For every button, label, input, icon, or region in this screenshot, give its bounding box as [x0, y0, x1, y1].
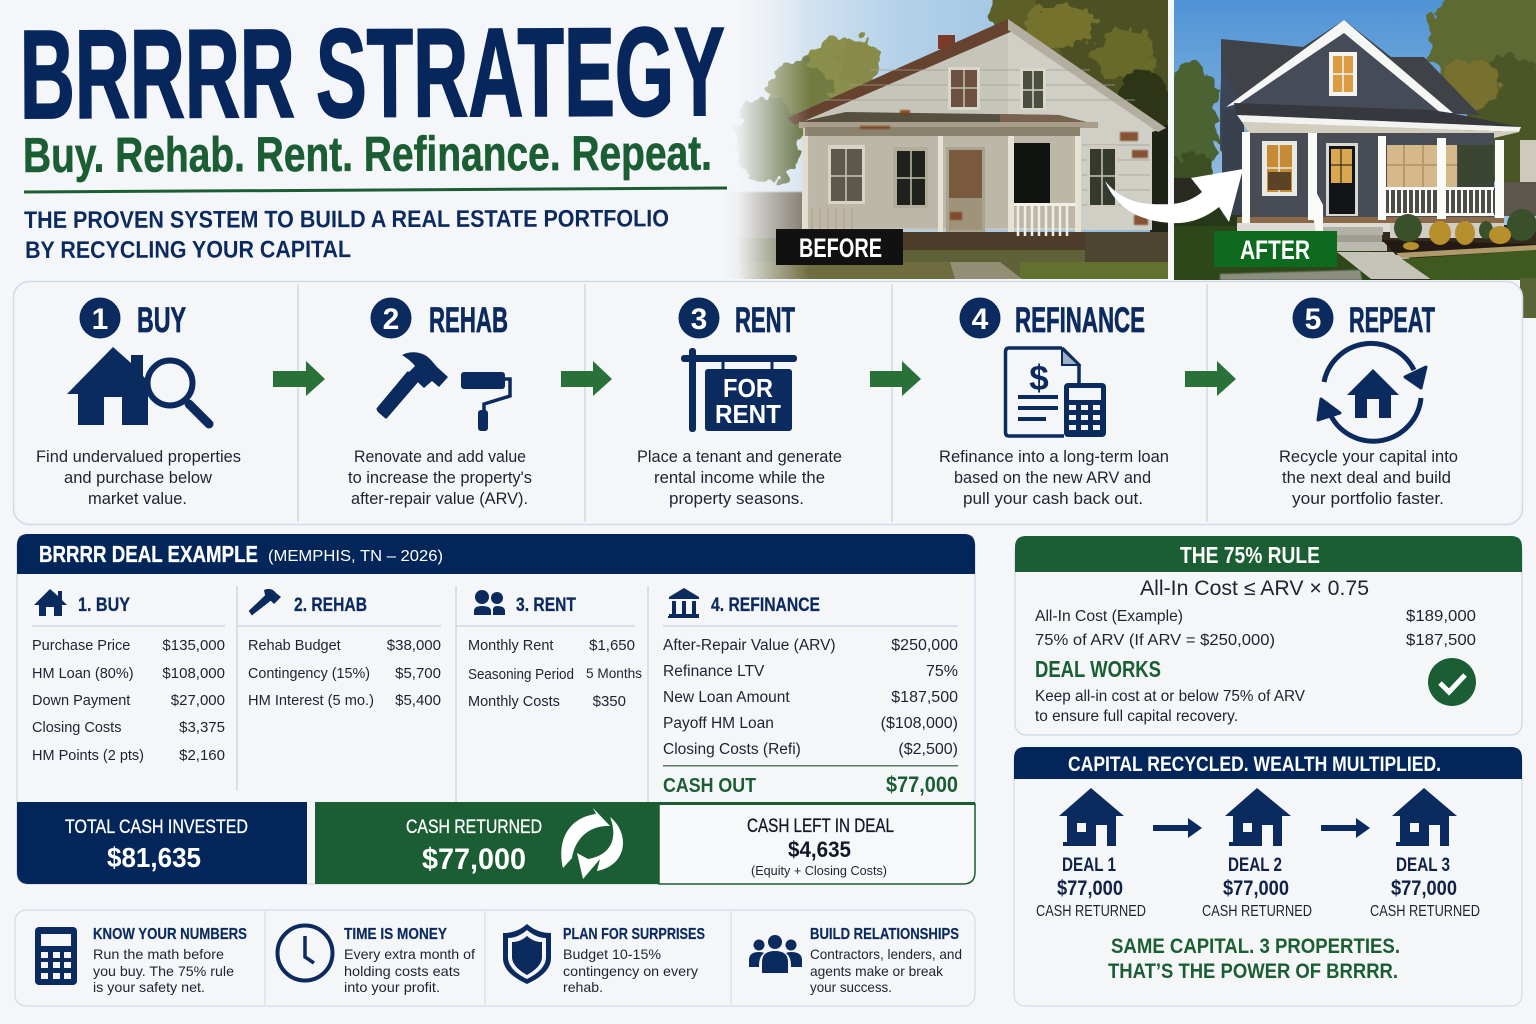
deal 1: [1036, 788, 1146, 920]
step 1 buy: BUY: [137, 301, 186, 340]
column: buy: Purchase Price: [32, 638, 130, 654]
step 2 rehab: to increase the property's: [348, 469, 532, 487]
arrow 3: [870, 361, 921, 396]
tip: build relationships: Contractors, lenders, and: [810, 946, 962, 962]
step 1 buy: 1: [92, 303, 108, 336]
panel: tips: [15, 910, 975, 1006]
deal works: DEAL WORKS: [1035, 656, 1161, 682]
deal header: [17, 534, 975, 574]
panel: deal example: [17, 534, 975, 884]
rule note: [1035, 688, 1306, 725]
arrow 2: [561, 361, 612, 396]
tip: plan for surprises: PLAN FOR SURPRISES: [563, 926, 705, 943]
step 4 refinance: based on the new ARV and: [954, 469, 1151, 487]
tip: know your numbers: [35, 926, 247, 995]
tip: time is money: into your profit.: [344, 979, 440, 995]
tip: time is money: TIME IS MONEY: [344, 926, 447, 943]
column: refinance: New Loan Amount: [663, 689, 790, 706]
icon: house with magnifier: [67, 347, 209, 425]
column: buy: [32, 589, 225, 764]
upper windows: [948, 67, 980, 110]
step 4 refinance: Refinance into a long-term loan: [939, 448, 1169, 466]
arrow: [1153, 818, 1202, 838]
deal 1: $77,000: [1057, 877, 1123, 900]
porch wall: [807, 136, 1078, 228]
deal 3: [1370, 788, 1480, 920]
arrow 1: [273, 361, 325, 396]
stat: total cash invested: [17, 802, 307, 884]
rule note: to ensure full capital recovery.: [1035, 708, 1238, 725]
deal 2: $77,000: [1223, 877, 1289, 900]
tip: know your numbers: Run the math before: [93, 946, 224, 962]
capital header: [1014, 747, 1522, 779]
step 5 repeat: 5: [1305, 303, 1321, 336]
chimney: [938, 35, 955, 49]
capital header: CAPITAL RECYCLED. WEALTH MULTIPLIED.: [1068, 753, 1441, 776]
steps and walk: [1323, 227, 1383, 235]
column: buy: $2,160: [179, 747, 225, 764]
rule note: Keep all-in cost at or below 75% of ARV: [1035, 688, 1306, 705]
icon: document and calculator: [1006, 348, 1106, 437]
column: refinance: $187,500: [891, 689, 958, 706]
tip: build relationships: agents make or break: [810, 963, 944, 979]
rule header: [1015, 536, 1522, 572]
column: rent: 3. RENT: [516, 595, 576, 616]
rule header: THE 75% RULE: [1180, 542, 1320, 568]
photo: before house: [720, 0, 1190, 279]
deal header: BRRRR DEAL EXAMPLE: [39, 541, 258, 567]
step 5 repeat: REPEAT: [1349, 301, 1435, 340]
icon: calculator: [35, 927, 77, 985]
step 1 buy: Find undervalued properties: [36, 448, 241, 466]
column: buy: Down Payment: [32, 693, 130, 709]
column: rent: Seasoning Period: [468, 667, 574, 683]
column: refinance: Refinance LTV: [663, 663, 765, 680]
upper roof: [1221, 20, 1480, 115]
step 2 rehab: Renovate and add value: [354, 448, 526, 466]
column: buy: $3,375: [179, 719, 225, 736]
photo: after house: [1164, 0, 1536, 280]
formula: All-In Cost ≤ ARV × 0.75: [1140, 577, 1369, 600]
fade: [720, 0, 810, 279]
column: refinance: Payoff HM Loan: [663, 715, 774, 732]
column: refinance: 4. REFINANCE: [711, 595, 820, 616]
tip: build relationships: your success.: [810, 979, 892, 995]
icon: clock: [278, 926, 332, 980]
comparison rows: $189,000: [1406, 608, 1476, 625]
column: refinance: ($2,500): [898, 741, 958, 758]
column: buy: Closing Costs: [32, 720, 121, 736]
step 3 rent: rental income while the: [654, 469, 825, 487]
step 4 refinance: pull your cash back out.: [963, 490, 1143, 508]
before label: [776, 229, 903, 265]
comparison rows: All-In Cost (Example): [1035, 608, 1183, 625]
closing statement: SAME CAPITAL. 3 PROPERTIES.: [1111, 935, 1400, 958]
tip: plan for surprises: [503, 924, 705, 995]
icon: check: [1428, 658, 1476, 706]
porch floor and posts: [1237, 217, 1504, 223]
deal 2: DEAL 2: [1228, 855, 1282, 876]
posts and railing: [938, 136, 943, 240]
deal 1: DEAL 1: [1062, 855, 1116, 876]
deal 1: CASH RETURNED: [1036, 903, 1146, 920]
icon: for rent sign: [681, 348, 797, 432]
icon: house: [1392, 788, 1457, 846]
deal 3: CASH RETURNED: [1370, 903, 1480, 920]
panel: capital recycled: [1014, 747, 1522, 1006]
arrow: [1321, 818, 1370, 838]
column: rehab: $38,000: [387, 637, 441, 654]
lower roof: [1234, 103, 1521, 127]
after label: [1214, 231, 1337, 267]
column: rehab: $5,700: [395, 665, 441, 682]
icon: house: [1225, 788, 1291, 846]
column: rehab: HM Interest (5 mo.): [248, 693, 374, 709]
comparison rows: [1035, 608, 1476, 649]
comparison rows: $187,500: [1406, 632, 1476, 649]
column: refinance: Closing Costs (Refi): [663, 741, 801, 758]
tip: build relationships: BUILD RELATIONSHIPS: [810, 926, 959, 943]
column: refinance: CASH OUT: [663, 775, 756, 797]
step 4 refinance: REFINANCE: [1015, 301, 1145, 340]
column: rent: Monthly Rent: [468, 638, 553, 654]
panel: 75% rule: [1015, 536, 1522, 735]
step 3 rent: 3: [691, 303, 707, 336]
title: BRRRR STRATEGY: [20, 1, 725, 145]
stat: cash returned: $77,000: [422, 843, 526, 876]
step 1 buy: market value.: [88, 490, 187, 508]
stat: total cash invested: TOTAL CASH INVESTED: [65, 817, 248, 838]
deal 2: CASH RETURNED: [1202, 903, 1312, 920]
step 2 rehab: 2: [383, 303, 399, 336]
panel: five steps: [14, 282, 1522, 524]
step 4 refinance: 4: [972, 303, 989, 336]
deal 3: $77,000: [1391, 877, 1457, 900]
tip: build relationships: [749, 926, 962, 995]
deal header: (MEMPHIS, TN – 2026): [268, 548, 443, 565]
column: buy: HM Loan (80%): [32, 666, 134, 682]
column: buy: $27,000: [171, 692, 225, 709]
column: refinance: After-Repair Value (ARV): [663, 637, 836, 654]
icon: document and calculator: $: [1029, 359, 1049, 398]
column: rent: $1,650: [589, 637, 635, 654]
column: rehab: $5,400: [395, 692, 441, 709]
tip: plan for surprises: rehab.: [563, 979, 603, 995]
icon: hammer: [250, 589, 281, 614]
porch wall: [1249, 133, 1494, 217]
step 3 rent: property seasons.: [669, 490, 804, 508]
icon: house: [1059, 788, 1124, 846]
stat: cash left in deal: CASH LEFT IN DEAL: [747, 816, 894, 837]
tip: plan for surprises: Budget 10-15%: [563, 946, 661, 962]
stat: cash left in deal: (Equity + Closing Costs): [751, 863, 887, 878]
after label: AFTER: [1240, 235, 1310, 265]
tip: know your numbers: is your safety net.: [93, 979, 205, 995]
photo sliver at right of panel: [1520, 278, 1536, 318]
step 5 repeat: [1279, 298, 1458, 508]
tip: time is money: holding costs eats: [344, 963, 460, 979]
tip: time is money: Every extra month of: [344, 946, 475, 962]
column: rehab: 2. REHAB: [294, 595, 367, 616]
step 2 rehab: after-repair value (ARV).: [351, 490, 528, 508]
column: rehab: Rehab Budget: [248, 638, 341, 654]
arrow: before to after: [1105, 169, 1243, 223]
deal 2: [1202, 788, 1312, 920]
column: refinance: $250,000: [891, 637, 958, 654]
icon: bank: [668, 588, 699, 618]
column: rent: Monthly Costs: [468, 694, 560, 710]
arrow 4: [1185, 361, 1236, 396]
comparison rows: 75% of ARV (If ARV = $250,000): [1035, 632, 1275, 649]
step 3 rent: [637, 298, 842, 508]
step 2 rehab: [348, 298, 532, 508]
step 5 repeat: the next deal and build: [1282, 469, 1451, 487]
step 1 buy: [36, 298, 241, 508]
porch roof: [800, 112, 1086, 122]
gable: [1228, 33, 1438, 111]
before label: BEFORE: [799, 233, 882, 263]
tagline: BY RECYCLING YOUR CAPITAL: [25, 236, 351, 264]
stat: cash left in deal: [659, 802, 975, 884]
stat: total cash invested: $81,635: [107, 842, 201, 873]
column: refinance: $77,000: [886, 772, 958, 797]
icon: people: [474, 590, 505, 615]
closing statement: THAT’S THE POWER OF BRRRR.: [1108, 960, 1398, 983]
tip: know your numbers: you buy. The 75% rule: [93, 963, 234, 979]
column: rehab: Contingency (15%): [248, 666, 370, 682]
icon: for rent sign: FOR: [723, 373, 773, 403]
column: rent: [468, 590, 642, 710]
subtitle: Buy. Rehab. Rent. Refinance. Repeat.: [23, 127, 712, 183]
icon: for rent sign: RENT: [715, 399, 781, 429]
tip: time is money: [278, 926, 475, 995]
stat: cash returned: [315, 802, 659, 884]
column: rehab: [248, 589, 441, 709]
column: refinance: [663, 588, 958, 797]
step 3 rent: Place a tenant and generate: [637, 448, 842, 466]
icon: house: [34, 589, 67, 616]
deal 3: DEAL 3: [1396, 855, 1450, 876]
column: rent: $350: [593, 693, 626, 710]
siding texture: [812, 70, 1150, 215]
tip: know your numbers: KNOW YOUR NUMBERS: [93, 926, 247, 943]
icon: hammer and roller: [378, 352, 510, 431]
column: refinance: 75%: [926, 663, 958, 680]
tagline: [24, 205, 669, 264]
column: buy: $135,000: [162, 637, 225, 654]
tagline: THE PROVEN SYSTEM TO BUILD A REAL ESTATE PORTFOLIO: [24, 205, 669, 234]
step 3 rent: RENT: [735, 301, 795, 340]
step 5 repeat: Recycle your capital into: [1279, 448, 1458, 466]
column: buy: 1. BUY: [78, 595, 130, 616]
icon: shield: [503, 924, 551, 984]
stat: cash returned: CASH RETURNED: [406, 817, 542, 838]
tip: plan for surprises: contingency on every: [563, 963, 698, 979]
column: rent: 5 Months: [586, 665, 642, 681]
stat: cash left in deal: $4,635: [788, 837, 851, 862]
step 1 buy: and purchase below: [64, 469, 212, 487]
icon: recycle arrows: [561, 808, 623, 879]
step 5 repeat: your portfolio faster.: [1292, 490, 1444, 508]
step 2 rehab: REHAB: [429, 301, 508, 340]
closing statement: [1108, 935, 1400, 983]
step 4 refinance: [939, 298, 1169, 508]
icon: cycle with house: [1318, 343, 1426, 441]
icon: people group: [749, 935, 802, 973]
column: refinance: ($108,000): [881, 715, 958, 732]
column: buy: $108,000: [162, 665, 225, 682]
column: buy: HM Points (2 pts): [32, 748, 144, 764]
